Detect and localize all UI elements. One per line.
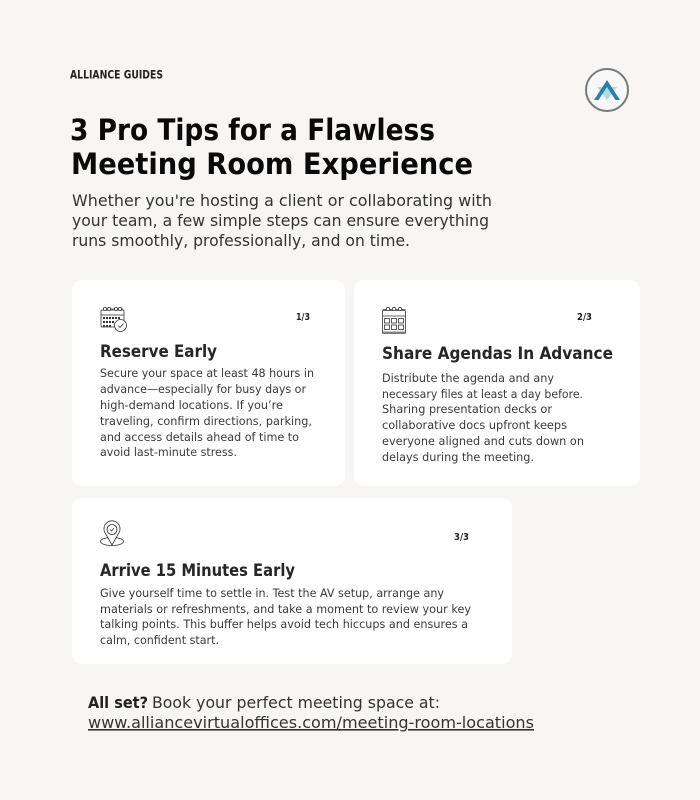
body text: share agendas: everyone aligned and cuts down on [382,434,584,448]
body text: share agendas: collaborative docs upfront keeps [382,418,567,432]
body text: share agendas: necessary files at least a day before. [382,387,583,401]
step number 3/3: 3/3 [454,532,469,543]
step number 2/3: 2/3 [577,312,592,323]
intro text: runs smoothly, professionally, and on time. [72,231,410,250]
intro text: your team, a few simple steps can ensure everything [72,211,489,230]
icon: calendar grid [382,307,406,334]
title [70,113,473,181]
title: 3 Pro Tips for a Flawless [70,113,435,147]
body text: reserve early [100,366,314,459]
heading: reserve early: Reserve Early [100,342,217,361]
body text: share agendas: Sharing presentation decks or [382,402,552,416]
body text: arrive early: calm, confident start. [100,633,219,647]
body text: share agendas: delays during the meeting. [382,450,534,464]
body text: arrive early [100,586,471,647]
intro text: Whether you're hosting a client or collaborating with [72,191,492,210]
call to action: Book your perfect meeting space at: [152,693,440,712]
call to action: All set? [88,693,148,712]
intro text [72,191,492,250]
body text: share agendas: Distribute the agenda and any [382,371,554,385]
panel: tip 1 reserve early [72,280,345,486]
title: Meeting Room Experience [71,147,473,181]
brand label: ALLIANCE GUIDES [70,68,163,82]
body text: arrive early: Give yourself time to settle in. Test the AV setup, arrange any [100,586,444,600]
body text: reserve early: high-demand locations. If you’re [100,398,283,412]
body text: reserve early: Secure your space at least 48 hours in [100,366,314,380]
body text: arrive early: talking points. This buffer helps avoid tech hiccups and ensures a [100,617,468,631]
body text: share agendas [382,371,584,464]
icon: Alliance logo [586,69,628,111]
body text: arrive early: materials or refreshments, and take a moment to review your key [100,602,471,616]
body text: reserve early: traveling, confirm directions, parking, [100,414,312,428]
panel: tip 2 share agendas [354,280,640,486]
call to action [88,693,534,732]
call to action: www.alliancevirtualoffices.com/meeting-room-locations [88,713,534,732]
heading: share agendas: Share Agendas In Advance [382,344,613,363]
icon: calendar with check [101,307,126,332]
panel: tip 3 arrive early [72,498,512,664]
heading: arrive early: Arrive 15 Minutes Early [100,561,295,580]
body text: reserve early: advance—especially for busy days or [100,382,306,396]
body text: reserve early: avoid last-minute stress. [100,445,237,459]
icon: map pin [100,521,124,546]
step number 1/3: 1/3 [296,312,310,323]
body text: reserve early: and access details ahead of time to [100,430,299,444]
